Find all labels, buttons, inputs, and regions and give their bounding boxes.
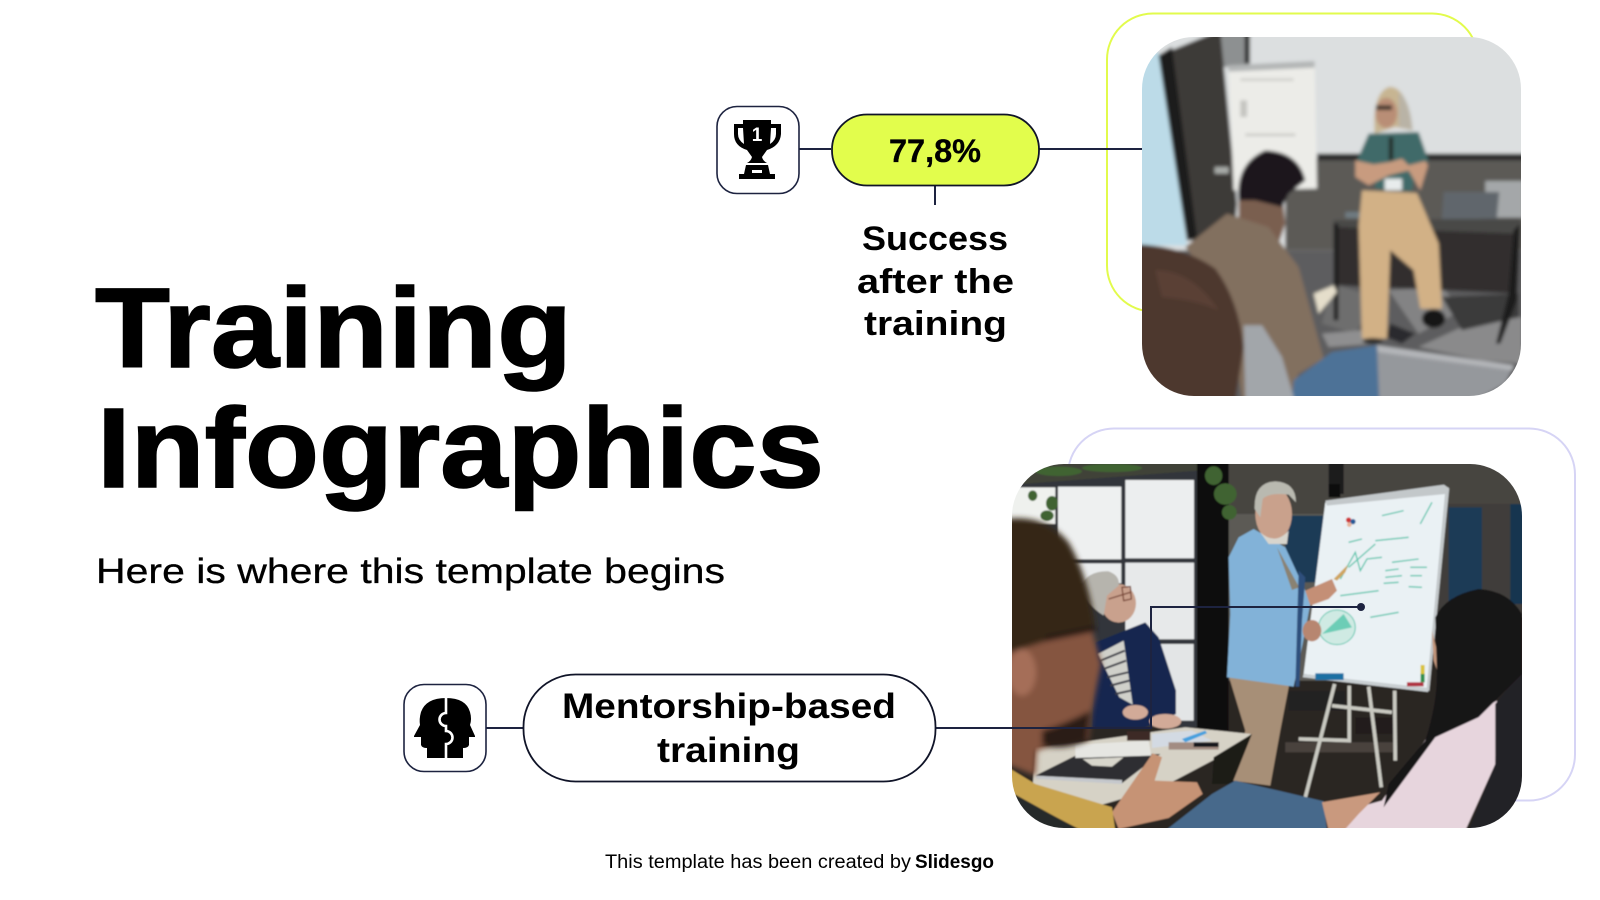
label: success after the training: after the [857,263,1014,301]
foreground man, out of focus [1005,518,1101,776]
lockers [1022,470,1198,728]
whiteboard [1304,487,1449,691]
footer credit: Slidesgo [915,852,994,873]
outline: yellow frame behind top photo [1107,14,1478,312]
label: success after the training [857,220,1014,343]
plants [1027,464,1142,522]
mentor [1229,676,1289,786]
icon: trophy: 1 [752,125,763,146]
trainer [1372,85,1403,136]
title: Training [95,265,572,391]
seated woman [1092,622,1176,727]
back wall [1228,464,1520,514]
table [1032,727,1251,806]
photo: trainer presenting to seated attendees [1135,30,1529,404]
icon: trophy [717,106,799,194]
label: success after the training: Success [862,220,1008,258]
connector: top pill to icon, pill to photo, pill to label [799,149,1142,205]
pill: percentage: 77,8% [889,133,981,169]
woman right [1345,701,1497,831]
pill: mentorship-based training: Mentorship-based [562,687,896,726]
outline: lavender frame behind bottom photo [1068,428,1575,800]
icon: two heads puzzle [404,684,486,772]
footer credit: This template has been created by [605,852,912,873]
photo: mentor pointing at whiteboard during a meeting [1005,457,1529,834]
jeans [1165,781,1327,831]
hand [1112,753,1203,829]
title: Infographics [97,385,824,511]
title [95,265,824,511]
seated man [1239,194,1285,244]
easel [1299,684,1395,797]
pill: percentage [832,114,1039,186]
pill: mentorship-based training [524,674,936,782]
pill: mentorship-based training: training [657,731,800,770]
connector: bottom pill to icon and whiteboard [486,603,1365,728]
subtitle: Here is where this template begins [96,552,725,591]
label: success after the training: training [864,305,1007,343]
